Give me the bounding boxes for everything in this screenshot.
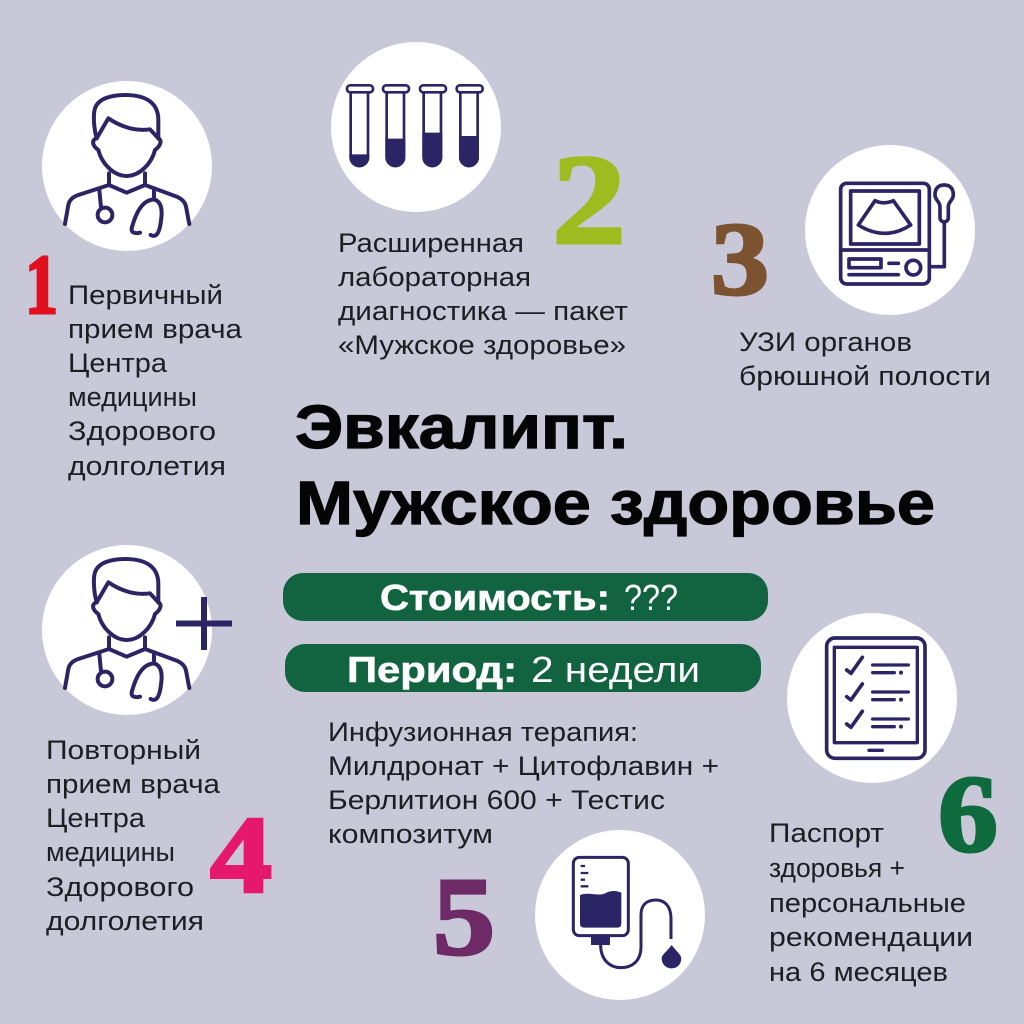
text: step 1: Здорового [68, 416, 216, 446]
text: step 5: Берлитион 600 + Тестис [328, 785, 665, 815]
text: step 4: медицины [46, 837, 175, 867]
text: step 6 [769, 818, 973, 987]
pill: price [283, 573, 768, 621]
text: step 3 [739, 327, 991, 391]
text: step 1: Первичный [68, 280, 223, 310]
number 1: 1 [25, 238, 58, 332]
text: step 3: брюшной полости [739, 361, 991, 391]
panel: step 5 icon, infusion bag [535, 830, 705, 1000]
text: step 1 [68, 280, 243, 481]
text: step 4 [46, 735, 221, 936]
text: step 4: Здорового [46, 872, 194, 902]
text: step 4: долголетия [46, 906, 204, 936]
text: step 6: персональные [769, 888, 966, 918]
text: step 6: на 6 месяцев [769, 957, 948, 987]
panel: step 1 icon, doctor [42, 81, 212, 251]
number 4: 4 [210, 794, 272, 916]
panel: step 4 icon, doctor with plus [42, 545, 232, 715]
text: step 3: УЗИ органов [739, 327, 912, 357]
number 5: 5 [433, 856, 495, 979]
text: step 4: Центра [46, 803, 146, 833]
text: step 4: прием врача [46, 769, 221, 799]
pill: period: Период: [347, 649, 517, 690]
text: step 6: здоровья + [769, 853, 905, 883]
text: step 6: рекомендации [769, 922, 973, 952]
title: Эвкалипт. [295, 393, 628, 461]
panel: step 3 icon, ultrasound machine [805, 145, 975, 315]
title [295, 393, 935, 537]
pill: price: Стоимость: [380, 577, 610, 618]
text: step 1: прием врача [68, 314, 243, 344]
pill: period: 2 недели [531, 649, 700, 690]
text: step 2: диагностика — пакет [338, 296, 628, 326]
text: step 4: Повторный [46, 735, 201, 765]
text: step 6: Паспорт [769, 818, 884, 848]
text: step 5: Инфузионная терапия: [328, 717, 638, 747]
text: step 1: Центра [68, 348, 168, 378]
number 2: 2 [552, 128, 626, 271]
text: step 2: Расширенная [338, 228, 524, 258]
text: step 5 [328, 717, 719, 849]
text: step 1: долголетия [68, 451, 226, 481]
text: step 1: медицины [68, 382, 197, 412]
text: step 5: композитум [328, 819, 493, 849]
pill: price: ??? [624, 577, 678, 618]
panel: step 6 icon, tablet checklist [787, 613, 957, 783]
text: step 2 [338, 228, 628, 360]
text: step 2: лабораторная [338, 262, 531, 292]
panel: step 2 icon, test tubes [331, 42, 501, 212]
pill: period [285, 644, 761, 692]
text: step 2: «Мужское здоровье» [338, 330, 626, 360]
number 3: 3 [711, 202, 769, 317]
text: step 5: Милдронат + Цитофлавин + [328, 751, 719, 781]
title: Мужское здоровье [296, 469, 935, 537]
number 6: 6 [938, 753, 998, 875]
